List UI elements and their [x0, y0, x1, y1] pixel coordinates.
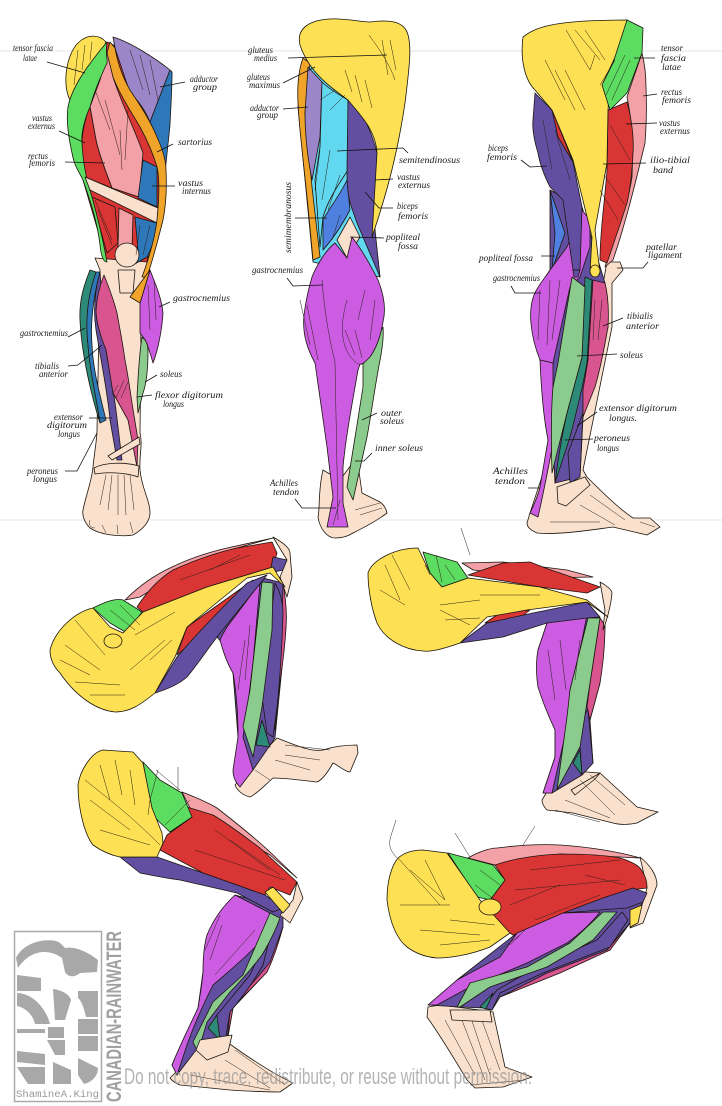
labels: front view: internus — [182, 187, 211, 197]
figure: front view of leg — [66, 36, 172, 536]
labels: back view: inner soleus — [375, 444, 423, 454]
labels: back view — [247, 46, 460, 508]
labels: side view: externus — [660, 127, 690, 137]
labels: front view: tibialis — [35, 362, 59, 372]
labels: side view: biceps — [488, 144, 508, 154]
labels: front view: externus — [28, 122, 55, 132]
labels: front view: digitorum — [47, 421, 87, 431]
labels: front view: vastus — [32, 114, 52, 124]
labels: side view: patellar — [645, 243, 677, 253]
labels: front view: peroneus — [26, 467, 58, 477]
labels: side view: fascia — [661, 53, 686, 64]
labels: front view: adductor — [190, 75, 218, 85]
labels: back view: adductor — [250, 104, 279, 114]
labels: side view: femoris — [662, 95, 691, 106]
figure: bent leg, knee forward left — [78, 750, 303, 1092]
icon: spiral swirl blocks — [17, 989, 98, 1084]
labels: front view: tensor fascia — [13, 43, 53, 54]
figure: bent leg, deep crouch right — [387, 845, 657, 1088]
labels: side view: longus. — [609, 414, 637, 424]
labels: back view: gastrocnemius — [252, 266, 303, 276]
labels: side view: popliteal fossa — [478, 253, 533, 264]
figure: bent leg, thigh raised right — [368, 548, 658, 824]
hip strokes above bent legs — [156, 528, 535, 858]
figure: back view of leg — [298, 19, 410, 538]
labels: back view: group — [257, 111, 278, 121]
figure: bent leg, thigh raised left — [50, 537, 358, 797]
labels: front view: longus — [163, 400, 184, 410]
labels: side view: femoris — [487, 152, 517, 163]
labels: side view: vastus — [659, 119, 680, 129]
labels: side view: ilio-tibial — [650, 156, 690, 166]
text: artist signature: ShamineA.King — [16, 1089, 99, 1101]
labels: back view: soleus — [380, 417, 404, 427]
watermark text: Do not copy, trace, redistribute, or reuse without permission. — [124, 1064, 532, 1089]
labels: side view: band — [653, 166, 673, 176]
labels: front view: vastus — [178, 179, 203, 189]
labels: back view: externus — [398, 181, 430, 191]
figure: side view of leg — [522, 20, 660, 535]
labels: back view: Achilles — [269, 479, 298, 489]
labels: front view: longus — [58, 430, 80, 440]
labels: back view: semitendinosus — [399, 156, 460, 166]
labels: side view: anterior — [626, 322, 659, 332]
labels: side view: tibialis — [627, 312, 653, 322]
labels: back view: medius — [254, 54, 277, 64]
icon: horse head and mane — [16, 940, 98, 991]
labels: back view: femoris — [398, 211, 428, 222]
labels: front view: longus — [33, 475, 57, 485]
text: vertical brand: CANADIAN-RAINWATER — [103, 931, 126, 1102]
labels: front view: sartorius — [178, 138, 212, 148]
labels: back view: outer — [381, 409, 402, 419]
labels: side view: extensor digitorum — [599, 404, 677, 414]
labels: back view: gluteus — [247, 73, 270, 83]
labels: front view: anterior — [39, 370, 68, 380]
labels: front view: gastrocnemius — [173, 294, 230, 304]
labels: side view: gastrocnemius — [493, 274, 540, 284]
labels: front view: flexor digitorum — [155, 390, 223, 401]
labels: side view: peroneus — [593, 434, 630, 444]
labels: back view: maximus — [249, 81, 280, 91]
labels: front view — [13, 43, 230, 485]
labels: side view: longus — [597, 444, 619, 454]
labels: back view: gluteus — [248, 46, 273, 56]
labels: front view: femoris — [29, 158, 55, 169]
labels: back view: biceps — [397, 202, 418, 212]
labels: back view: semimembranosus — [284, 182, 294, 253]
labels: side view: Achilles — [492, 467, 528, 477]
labels: side view: tendon — [495, 477, 525, 487]
labels: side view: tensor — [661, 44, 683, 54]
labels: front view: soleus — [160, 370, 182, 380]
labels: side view: latae — [662, 63, 681, 73]
labels: front view: rectus — [28, 152, 48, 162]
labels: back view: popliteal — [385, 233, 420, 243]
logo: watermark panel — [14, 931, 126, 1102]
labels: side view: soleus — [620, 351, 643, 361]
labels: front view: latae — [23, 54, 37, 64]
labels: back view: vastus — [397, 173, 420, 183]
labels: front view: gastrocnemius — [20, 329, 68, 339]
labels: back view: tendon — [273, 488, 299, 498]
labels: front view: group — [193, 83, 217, 93]
labels: side view: ligament — [648, 251, 682, 261]
labels: front view: extensor — [54, 413, 83, 423]
labels: side view: rectus — [661, 88, 682, 98]
labels: side view — [478, 44, 691, 488]
labels: back view: fossa — [398, 241, 418, 252]
